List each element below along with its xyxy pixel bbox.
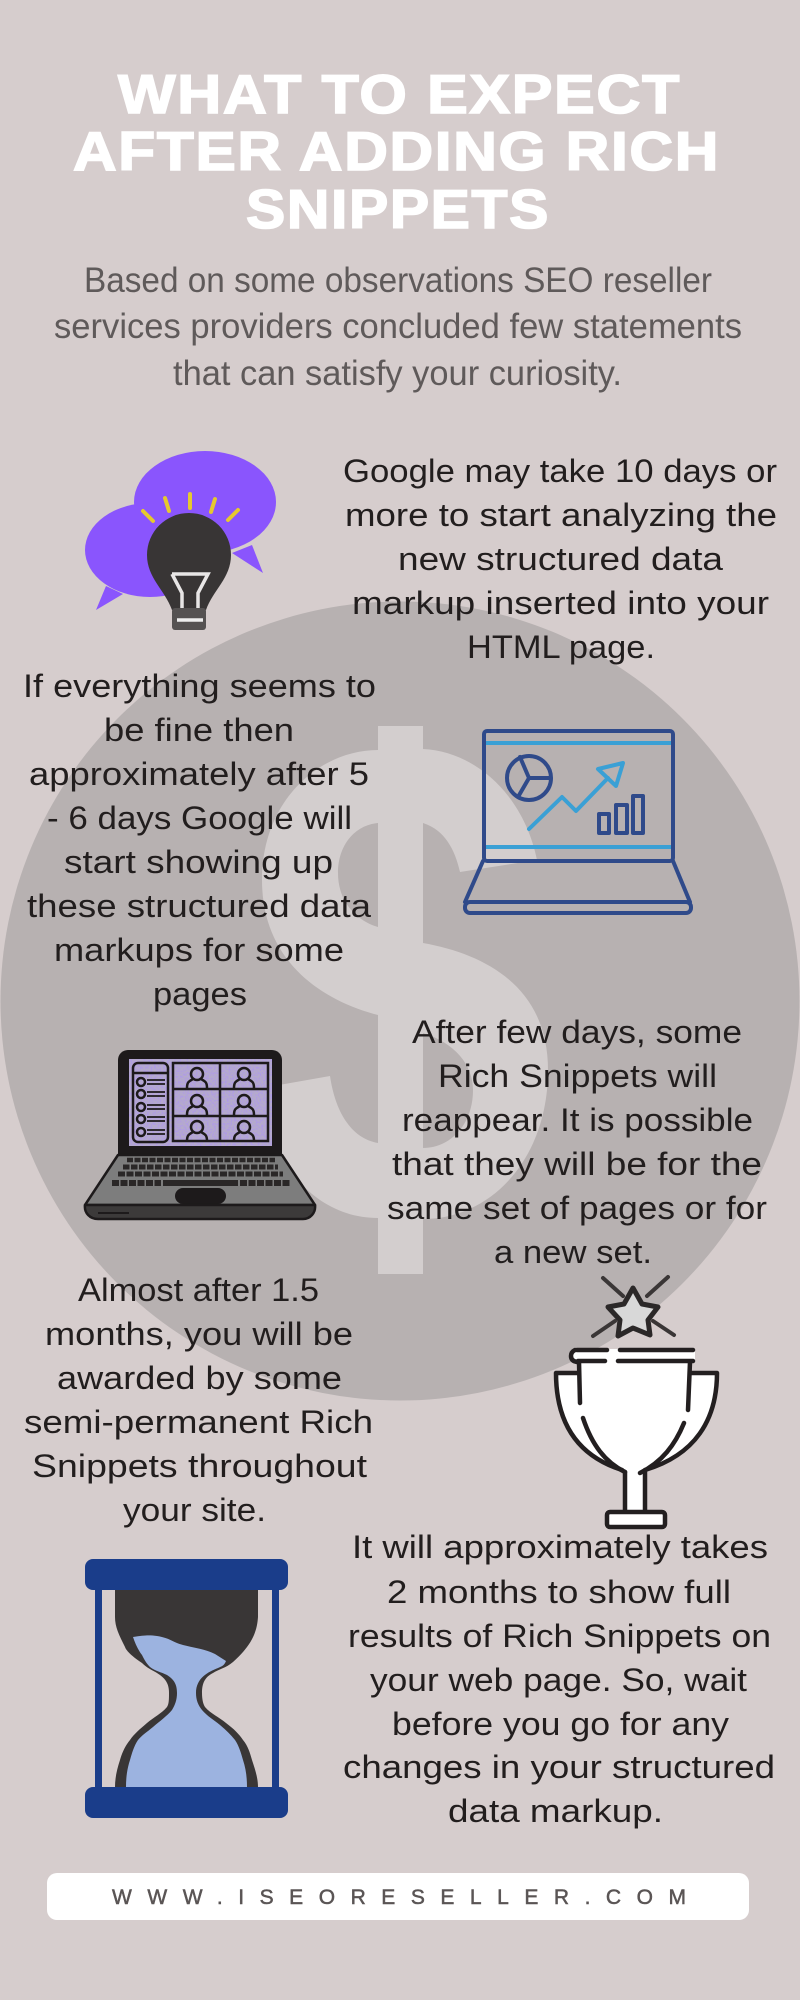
- text block: After few days: After few days, some: [412, 1014, 742, 1050]
- text block: It will approximately take 2 months: data markup.: [448, 1793, 663, 1829]
- text block: After few days: that they will be for the: [392, 1146, 762, 1182]
- text block: If everything seems fine: these structured data: [27, 888, 371, 924]
- title: SNIPPETS: [246, 178, 550, 240]
- text block: If everything seems fine: be fine then: [104, 712, 294, 748]
- text block: After few days: Rich Snippets will: [438, 1058, 717, 1094]
- background dollar coin: [0, 602, 800, 1400]
- footer website banner: [47, 1873, 749, 1920]
- icon: laptop with video call: [85, 1050, 315, 1219]
- icon: laptop with analytics chart: [465, 731, 691, 913]
- title: WHAT TO EXPECT: [118, 63, 681, 125]
- text block: It will approximately take 2 months: [343, 1529, 775, 1829]
- text block: After few days: reappear. It is possible: [402, 1102, 753, 1138]
- text block: It will approximately take 2 months: before you go for any: [392, 1706, 729, 1742]
- text block: It will approximately take 2 months: 2 months to show full: [387, 1574, 731, 1610]
- subtitle: [54, 261, 742, 393]
- text block: If everything seems fine: approximately after 5: [29, 756, 369, 792]
- title: AFTER ADDING RICH: [73, 120, 720, 182]
- text block: After few days: [387, 1014, 767, 1270]
- text block: Almost after 1.5 months: Almost after 1.5: [78, 1272, 319, 1308]
- text block: It will approximately take 2 months: your web page. So, wait: [370, 1662, 747, 1698]
- text block: If everything seems fine: pages: [153, 976, 247, 1012]
- text block: Almost after 1.5 months: [24, 1272, 373, 1528]
- text block: After few days: same set of pages or for: [387, 1190, 767, 1226]
- text block: It will approximately take 2 months: changes in your structured: [343, 1749, 775, 1785]
- text block: It will approximately take 2 months: It will approximately takes: [352, 1529, 768, 1565]
- text block: Google may take 10 days: more to start analyzing the: [345, 497, 777, 533]
- footer website banner: WWW.ISEORESELLER.COM: [112, 1886, 686, 1909]
- icon: trophy with star: [556, 1277, 717, 1527]
- text block: It will approximately take 2 months: results of Rich Snippets on: [348, 1618, 771, 1654]
- text block: If everything seems fine: start showing up: [64, 844, 333, 880]
- text block: Google may take 10 days: new structured data: [398, 541, 723, 577]
- subtitle: that can satisfy your curiosity.: [173, 354, 622, 393]
- text block: Almost after 1.5 months: months, you will be: [45, 1316, 353, 1352]
- text block: Almost after 1.5 months: your site.: [123, 1492, 266, 1528]
- icon: hourglass: [85, 1559, 288, 1818]
- subtitle: services providers concluded few statements: [54, 307, 742, 346]
- text block: Almost after 1.5 months: Snippets throughout: [32, 1448, 367, 1484]
- text block: Google may take 10 days: Google may take 10 days or: [343, 453, 777, 489]
- text block: Google may take 10 days: markup inserted into your: [352, 585, 769, 621]
- text block: Google may take 10 days: [343, 453, 777, 665]
- text block: Almost after 1.5 months: awarded by some: [57, 1360, 342, 1396]
- text block: Google may take 10 days: HTML page.: [467, 629, 655, 665]
- subtitle: Based on some observations SEO reseller: [84, 261, 712, 300]
- text block: If everything seems fine: markups for some: [54, 932, 344, 968]
- text block: Almost after 1.5 months: semi-permanent Rich: [24, 1404, 373, 1440]
- text block: If everything seems fine: If everything seems to: [23, 668, 376, 704]
- text block: If everything seems fine: [23, 668, 376, 1012]
- title: [73, 63, 720, 240]
- icon: light bulb with speech bubbles: [85, 451, 276, 630]
- text block: If everything seems fine: - 6 days Google will: [47, 800, 352, 836]
- text block: After few days: a new set.: [494, 1234, 652, 1270]
